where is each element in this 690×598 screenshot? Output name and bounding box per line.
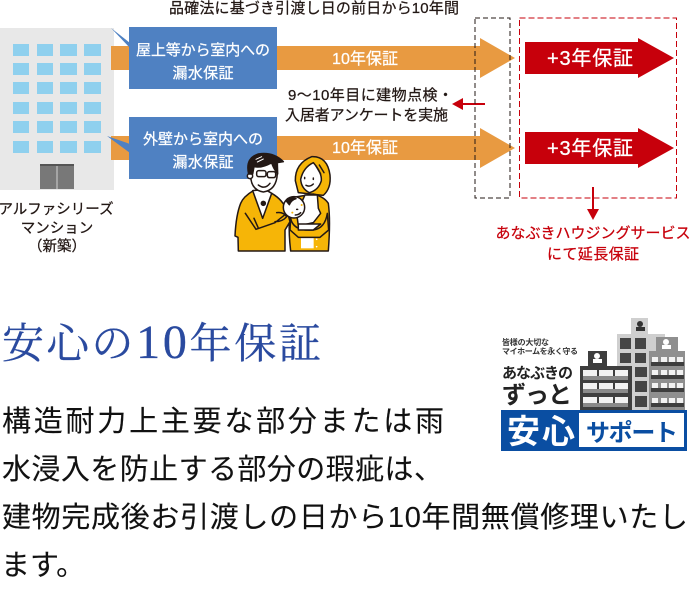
icon: apartment building — [0, 28, 114, 190]
logo banner: 安心 — [507, 413, 575, 450]
dashed box: 10 year end — [475, 18, 510, 198]
inspection note: 入居者アンケートを実施 — [285, 107, 448, 124]
logo: anabuki zutto anshin support — [501, 318, 687, 451]
body text: 建物完成後お引渡しの日から10年間無償修理いたし — [2, 501, 688, 534]
logo: anabuki zutto anshin support: ずっと — [502, 382, 572, 409]
logo name: あなぶきの — [502, 365, 573, 382]
logo tagline — [502, 337, 578, 356]
arrow: lower 10-year warranty: 10年保証 — [332, 139, 398, 157]
mother arm — [290, 213, 329, 237]
baby head — [283, 197, 305, 218]
inspection note — [285, 87, 453, 124]
callout: exterior wall leak warranty: 外壁から室内への — [143, 131, 263, 148]
callout: roof leak warranty: 屋上等から室内への — [136, 41, 270, 59]
arrow: upper 10-year warranty — [111, 38, 515, 78]
heading: 安心の10年保証 — [2, 316, 321, 369]
illustration: family — [235, 154, 330, 251]
mother skirt — [301, 236, 314, 248]
extended warranty note: にて延長保証 — [547, 246, 639, 263]
building label: マンション — [21, 221, 93, 237]
callout: exterior wall leak warranty — [107, 117, 277, 179]
arrow: upper 10-year warranty: 10年保証 — [332, 50, 398, 68]
father arms — [245, 212, 287, 229]
logo tagline: 皆様の大切な — [502, 337, 549, 347]
mother face — [301, 163, 321, 193]
father face — [251, 163, 277, 192]
arrow: inspection pointer — [452, 98, 485, 110]
inspection note: 9～10年目に建物点検・ — [288, 87, 453, 104]
callout: roof leak warranty: 漏水保証 — [172, 65, 234, 82]
extended warranty note — [496, 225, 690, 263]
body text: 構造耐力上主要な部分または雨 — [2, 405, 444, 438]
body text: ます。 — [1, 550, 85, 582]
building label: アルファシリーズ — [0, 201, 114, 218]
mother coat — [289, 194, 329, 251]
logo banner — [501, 410, 687, 451]
arrow: lower 10-year warranty — [111, 128, 515, 168]
arrow: down to extension note — [587, 187, 599, 220]
arrow: upper +3 year warranty — [525, 38, 674, 78]
building label: （新築） — [28, 237, 86, 255]
baby body — [297, 195, 321, 226]
callout: roof leak warranty — [111, 27, 277, 89]
logo banner: サポート — [586, 420, 678, 447]
father coat — [235, 191, 290, 251]
building label — [0, 201, 114, 255]
dashed box: extended warranty period — [520, 18, 676, 198]
arrow: lower +3 year warranty — [525, 128, 674, 168]
extended warranty note: あなぶきハウジングサービス — [496, 225, 690, 242]
arrow: upper +3 year warranty: +3年保証 — [547, 47, 633, 70]
arrow: lower +3 year warranty: +3年保証 — [547, 137, 633, 160]
body text: 水浸入を防止する部分の瑕疵は、 — [2, 453, 443, 486]
mother hair — [295, 157, 330, 195]
callout: exterior wall leak warranty: 漏水保証 — [172, 154, 234, 171]
diagram title: 品確法に基づき引渡し日の前日から10年間 — [169, 0, 459, 17]
logo tagline: マイホームを永く守る — [502, 346, 578, 356]
body text — [1, 405, 688, 582]
logo buildings — [580, 318, 685, 410]
father shirt — [253, 189, 272, 218]
father hair — [248, 154, 283, 174]
father glasses — [257, 171, 266, 177]
